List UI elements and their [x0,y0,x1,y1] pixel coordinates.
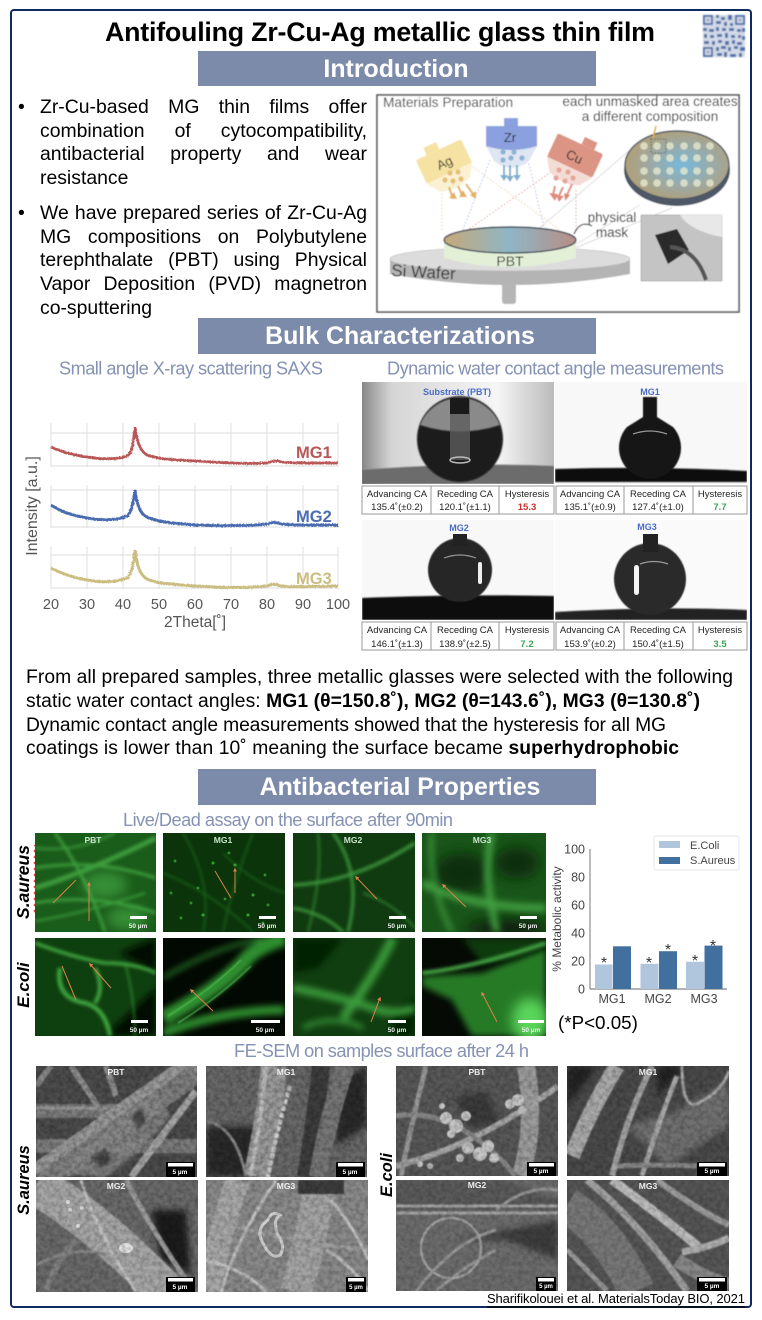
axes [589,849,591,989]
table: contact angle values: 138.9˚(±2.5) [439,639,491,650]
label: E.coli row: E.coli [14,961,33,1008]
table: contact angle values: 146.1˚(±1.3) [371,639,423,650]
curve: MG1 [51,427,338,463]
micrograph: S.aureus PBT: 50 µm [129,923,147,930]
chart: SAXS intensity plot: 50 [151,597,167,613]
micrograph: E.coli PBT [35,938,156,1036]
SEM: S.aureus MG3: 5 µm [349,1285,363,1291]
micrograph: S.aureus MG2: 50 µm [388,923,406,930]
SEM: S.aureus MG3 [206,1180,368,1292]
SEM: S.aureus PBT: PBT [108,1067,125,1077]
table: contact angle values: 135.4˚(±0.2) [371,502,423,513]
SEM: E.coli PBT: 5 µm [534,1168,549,1175]
label: physical mask: physical [588,210,636,225]
SEM: E.coli MG1: MG1 [639,1067,657,1077]
panel: contact angle Substrate PBT: Substrate (PBT) [423,387,491,397]
icon: Si wafer holder: Si Wafer [391,261,457,283]
label: S.aureus row: S.aureus [13,845,33,919]
y ticks: 20 [571,954,585,968]
table: contact angle values: 15.3 [518,502,536,513]
bullet: first introduction point: resistance [40,167,128,189]
table: contact angle values: 7.2 [520,639,534,650]
panel: contact angle MG1 [555,382,747,484]
SEM: S.aureus MG2: 5 µm [173,1284,188,1291]
note: (*P<0.05) [558,1012,638,1033]
table: contact angle values: 3.5 [713,639,727,650]
bullet: second introduction point: Vapor Deposition (PVD) magnetron [40,273,367,295]
table: contact angle values: Receding CA [437,489,494,500]
chart: SAXS intensity plot: 60 [187,597,203,613]
micrograph: E.coli MG1: 50 µm [256,1027,274,1034]
micrograph: S.aureus MG1 [163,833,285,932]
SEM: E.coli MG2: 5 µm [539,1284,553,1290]
chart: SAXS intensity plot: 70 [223,597,239,613]
micrograph: S.aureus PBT [35,833,156,932]
subheading: FE-SEM: FE-SEM on samples surface after 24 h [234,1041,529,1061]
table: contact angle values: Advancing CA [367,489,428,500]
icon: Zr source: Zr [504,130,517,145]
bullet: second introduction point: co-sputtering [40,297,152,319]
chart: metabolic activity bars [550,836,739,1033]
panel: contact angle MG2: MG2 [449,523,469,533]
text block: static contact angle summary [26,667,733,759]
SEM: S.aureus MG2 [36,1180,198,1292]
bullet: first introduction point: Zr-Cu-based MG thin films offer [40,96,367,118]
SEM: E.coli PBT [396,1066,558,1176]
micrograph: S.aureus MG3: MG3 [473,835,491,845]
figure: materials preparation: a different composition [582,109,718,124]
SEM: S.aureus MG2: MG2 [107,1181,125,1191]
table: contact angle values: Receding CA [437,625,494,636]
SEM: E.coli MG2: MG2 [468,1180,486,1190]
SEM: E.coli MG1: 5 µm [705,1168,720,1175]
figure: materials preparation [377,94,739,312]
chart: SAXS intensity plot: 100 [326,597,350,613]
micrograph: S.aureus MG3: 50 µm [519,923,537,930]
citation: Sharifikolouei et al. MaterialsToday BIO, 2021 [487,1291,745,1306]
bullet: second introduction point: terephthalate (PBT) using Physical [40,249,367,271]
label: E.coli SEM: E.coli [378,1153,396,1197]
table: contact angle values [362,486,747,650]
SEM: E.coli MG3: MG3 [639,1181,657,1191]
SEM: E.coli MG2 [396,1180,558,1291]
SEM: S.aureus PBT: 5 µm [173,1169,188,1176]
chart: metabolic activity bars: % Metabolic activity [550,866,564,972]
micrograph: E.coli PBT: 50 µm [130,1027,148,1034]
icon: Cu source: Cu [564,147,585,167]
panel: contact angle MG2 [362,520,554,620]
x labels: MG2 [644,992,672,1006]
bars [595,946,722,989]
table: contact angle values: Hysteresis [505,489,549,500]
table: contact angle values: Hysteresis [698,625,742,636]
significance stars: * [692,953,698,970]
table: contact angle values: 127.4˚(±1.0) [632,502,684,513]
text block: static contact angle summary: coatings is lower than 10˚ meaning the surface became superhydrophobic [26,737,679,759]
icon: Cu source [540,126,607,202]
x labels [598,992,718,1006]
table: contact angle values: 153.9˚(±0.2) [564,639,616,650]
icon: PBT disc with mask [444,227,576,269]
icon: QR code [703,15,745,57]
bullet: second introduction point [18,202,367,319]
bullet: second introduction point: MG compositions on Polybutylene [40,226,367,248]
bullet: second introduction point: • [18,202,25,224]
panel: contact angle MG3 [555,520,747,620]
y ticks: 80 [571,870,585,884]
axis labels: Intensity [a.u.] [24,456,41,556]
table: contact angle values: 7.7 [713,502,727,513]
chart: SAXS intensity plot: 80 [259,597,275,613]
significance stars: * [601,955,607,972]
micrograph: E.coli MG2 [293,938,415,1036]
panel: contact angle MG1: MG1 [640,387,660,397]
subheading: contact angle: Dynamic water contact angle measurements [387,358,724,378]
x labels: MG3 [690,992,718,1006]
heading: Antibacterial Properties [198,769,596,805]
table: contact angle values: 150.4˚(±1.5) [632,639,684,650]
text block: static contact angle summary: Dynamic contact angle measurements showed that the hysteresis for all MG [26,715,666,736]
panel: contact angle Substrate PBT [362,382,554,484]
bullet: second introduction point: We have prepared series of Zr-Cu-Ag [40,202,367,224]
SEM: E.coli MG3: 5 µm [705,1283,720,1290]
table: contact angle values: Advancing CA [367,625,428,636]
curve: MG3 [51,550,338,588]
table: contact angle values: 120.1˚(±1.1) [439,502,491,513]
chart: SAXS intensity plot: MG2 [296,508,332,526]
micrograph: S.aureus MG2: MG2 [344,835,362,845]
panel: contact angle MG3: MG3 [637,522,657,532]
curve: MG2 [51,490,338,526]
x labels: MG1 [598,992,626,1006]
title: Antifouling Zr-Cu-Ag metallic glass thin film [105,17,655,47]
chart: SAXS intensity plot: 30 [79,597,95,613]
significance stars: * [710,938,716,955]
chart: SAXS intensity plot: 20 [43,597,59,613]
micrograph: E.coli MG2: 50 µm [388,1027,406,1034]
grid lines [51,423,338,589]
text block: static contact angle summary: From all prepared samples, three metallic glasses were selected with the following [26,667,733,688]
heading: Introduction [198,51,596,86]
subheading: SAXS: Small angle X-ray scattering SAXS [59,358,323,378]
chart: SAXS intensity plot: 90 [295,597,311,613]
micrograph: S.aureus PBT: PBT [84,835,102,845]
bullet: first introduction point: antibacterial property and wear [40,143,367,165]
SEM: S.aureus MG1: MG1 [277,1067,295,1077]
icon: Ag source: Ag [434,153,455,173]
icon: combinatorial wafer close-up [624,126,730,206]
SEM: E.coli MG3 [567,1180,729,1291]
y ticks [564,842,585,996]
legend: S.Aureus [690,855,736,867]
figure: materials preparation: Materials Preparation [383,95,513,110]
significance stars [601,938,716,972]
legend labels: MG1 [296,444,332,462]
icon: Ag source [412,132,479,199]
legend: E.Coli [690,840,719,852]
SEM: E.coli MG1 [567,1066,729,1176]
heading: Bulk Characterizations: Bulk Characterizations [265,322,535,350]
subheading: live dead assay: Live/Dead assay on the surface after 90min [123,810,453,830]
chart: SAXS intensity plot: 2Theta[˚] [164,614,226,631]
label: S.aureus SEM: S.aureus [15,1145,33,1215]
SEM: E.coli PBT: PBT [468,1067,486,1077]
table: contact angle values: Advancing CA [560,489,621,500]
table: contact angle values: Hysteresis [698,489,742,500]
y ticks: 40 [571,926,585,940]
photo: coated sample [641,215,722,281]
y ticks: 60 [571,898,585,912]
table: contact angle values: Hysteresis [505,625,549,636]
y ticks: 100 [564,842,585,856]
significance stars: * [646,955,652,972]
micrograph: E.coli MG3 [422,938,548,1042]
bullet: first introduction point: combination of cytocompatibility, [40,120,367,142]
table: contact angle values: Advancing CA [560,625,621,636]
dashed deposition lines [442,160,576,234]
legend [654,836,739,870]
micrograph: E.coli MG3: 50 µm [522,1027,540,1034]
heading: Antibacterial Properties: Antibacterial Properties [260,773,540,801]
text block: static contact angle summary: static water contact angles: MG1 (θ=150.8˚), MG2 (θ=143.6˚), MG3 (θ=130.8˚) [26,689,700,712]
micrograph: S.aureus MG1: 50 µm [258,923,276,930]
icon: Si wafer holder [390,247,630,304]
y ticks: 0 [578,982,585,996]
micrograph: S.aureus MG1: MG1 [214,835,232,845]
icon: PBT disc with mask: PBT [496,253,524,269]
SEM: S.aureus MG1: 5 µm [343,1169,358,1176]
significance stars: * [665,942,671,959]
micrograph: E.coli MG1 [163,938,285,1036]
heading: Introduction: Introduction [323,55,469,83]
table: contact angle values: Receding CA [630,489,687,500]
table: contact angle values: 135.1˚(±0.9) [564,502,616,513]
SEM: S.aureus PBT [36,1061,197,1184]
icon: Zr source [486,118,537,182]
label: physical mask: mask [596,225,628,240]
chart: SAXS intensity plot: MG3 [296,570,332,588]
chart: SAXS intensity plot: 40 [115,597,131,613]
label: physical mask [574,210,636,240]
figure: materials preparation: each unmasked area creates [562,94,738,109]
micrograph: S.aureus MG2 [293,833,415,932]
bullet: first introduction point [18,96,367,189]
spellcheck squiggle [34,845,37,914]
SEM: S.aureus MG3: MG3 [277,1181,295,1191]
SEM: S.aureus MG1 [206,1066,367,1177]
table: contact angle values: Receding CA [630,625,687,636]
chart: SAXS intensity plot [24,423,350,631]
bullet: first introduction point: • [18,96,25,118]
micrograph: S.aureus MG3 [422,833,547,937]
heading: Bulk Characterizations [198,318,596,354]
